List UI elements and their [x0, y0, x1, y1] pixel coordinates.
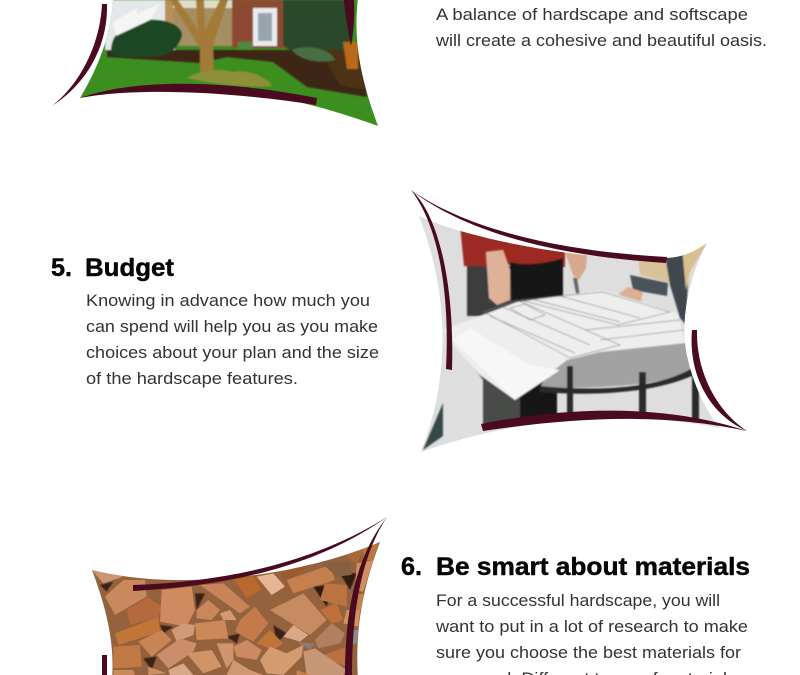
text: materials body: [435, 591, 748, 675]
photo: garden yard: [52, 0, 380, 128]
heading: 5. Budget: [51, 254, 175, 282]
text: balance of hardscape and softscape: A balance of hardscape and softscape: [436, 5, 748, 24]
heading: 6. Be smart about materials: 6.: [401, 553, 422, 581]
photo: blueprint on table: [410, 190, 747, 460]
heading: 5. Budget: Budget: [85, 254, 175, 282]
heading: 6. Be smart about materials: Be smart about materials: [436, 553, 750, 581]
photo: pile of bricks: [85, 517, 387, 675]
text: materials body: want to put in a lot of research to make: [435, 617, 748, 636]
text: balance of hardscape and softscape: [435, 5, 767, 50]
text: materials body: sure you choose the best materials for: [436, 643, 741, 662]
text: budget body: Knowing in advance how much you: [86, 291, 370, 310]
text: budget body: can spend will help you as you make: [86, 317, 378, 336]
text: budget body: choices about your plan and the size: [86, 343, 379, 362]
text: materials body: For a successful hardscape, you will: [436, 591, 720, 610]
crescent strokes: [52, 0, 354, 106]
text: budget body: [86, 291, 379, 388]
text: budget body: of the hardscape features.: [86, 369, 298, 388]
crescent strokes: [102, 517, 387, 675]
heading: 5. Budget: 5.: [51, 254, 72, 282]
crescent strokes: [411, 190, 747, 431]
text: balance of hardscape and softscape: will create a cohesive and beautiful oasis.: [435, 31, 767, 50]
